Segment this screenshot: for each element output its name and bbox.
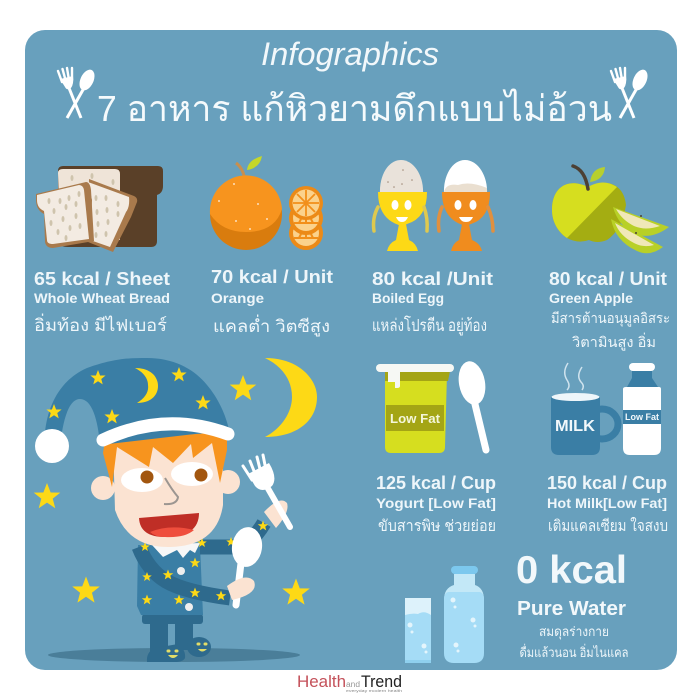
mouth: [139, 513, 199, 537]
label: orange: แคลต่ำ วิตซีสูง: [213, 314, 330, 337]
title: Thai headline: 7 อาหาร แก้หิวยามดึกแบบไม่อ้วน: [97, 88, 612, 129]
label: yogurt: ขับสารพิษ ช่วยย่อย: [378, 518, 496, 535]
label: boiled egg: Boiled Egg: [372, 291, 444, 306]
moon: [265, 358, 317, 437]
icon: right fork and spoon: [611, 67, 651, 118]
cap brim: [103, 424, 228, 440]
icon: green apple: [552, 166, 669, 253]
label: orange: Orange: [211, 291, 265, 306]
pajama body: [137, 545, 203, 615]
spoon: [229, 525, 265, 605]
label: pure water: สมดุลร่างกาย: [539, 624, 609, 640]
sleeve front: [139, 547, 230, 598]
label: pure water: [516, 549, 628, 660]
illustration: boy in nightcap: [34, 358, 317, 662]
body stars: [140, 520, 268, 604]
label: green apple: มีสารต้านอนุมูลอิสระ: [551, 310, 670, 327]
icon: orange: [210, 156, 323, 250]
logo: Health and Trend: Health: [297, 672, 346, 691]
nose: [164, 478, 178, 504]
icon: spoon: [455, 359, 489, 450]
label: pure water: ดื่มแล้วนอน อิ่มไนแคล: [520, 644, 628, 660]
title: [97, 36, 612, 129]
hair: [103, 432, 227, 487]
ears: [91, 476, 115, 500]
raised hand: [264, 500, 288, 528]
label: bread: [34, 269, 170, 335]
label: hot milk: Hot Milk[Low Fat]: [547, 496, 667, 511]
icon: low fat milk bottle: Low Fat: [625, 412, 660, 423]
logo: Health and Trend: [297, 672, 402, 693]
loose stars: [34, 375, 310, 605]
collar: [152, 543, 200, 558]
label: yogurt: Yogurt [Low Fat]: [376, 496, 496, 511]
label: yogurt: 125 kcal / Cup: [376, 473, 496, 493]
logo: Health and Trend: everyday modern health: [346, 688, 402, 693]
icon: hot milk mug: [551, 363, 618, 455]
sleeve raised: [200, 523, 264, 547]
icon: whole wheat bread: [36, 166, 163, 252]
cap moon: [135, 368, 158, 403]
label: pure water: 0 kcal: [516, 549, 627, 592]
label: green apple: [549, 269, 670, 351]
cap stars: [46, 367, 211, 423]
label: boiled egg: 80 kcal /Unit: [372, 269, 493, 289]
icon: boiled eggs: [374, 160, 493, 251]
icon: low fat milk bottle: [623, 363, 661, 455]
icon: left fork and spoon: [58, 67, 98, 118]
title: Infographics: Infographics: [261, 36, 439, 72]
face: [113, 440, 223, 547]
eyes: [121, 468, 163, 492]
label: hot milk: [547, 473, 668, 535]
label: yogurt: [376, 473, 496, 535]
label: green apple: 80 kcal / Unit: [549, 269, 667, 289]
label: green apple: วิตามินสูง อิ่ม: [572, 333, 656, 351]
icon: water bottle: [444, 566, 484, 663]
icon: water glass: [405, 598, 431, 663]
label: orange: 70 kcal / Unit: [211, 267, 333, 287]
shadow: [48, 648, 300, 662]
logo: Health and Trend: Trend: [361, 672, 402, 691]
label: orange: [211, 267, 333, 337]
label: bread: อิ่มท้อง มีไฟเบอร์: [34, 313, 167, 335]
pompom: [35, 429, 69, 463]
icon: low fat yogurt: Low Fat: [390, 412, 441, 426]
label: hot milk: 150 kcal / Cup: [547, 473, 667, 493]
label: hot milk: เติมแคลเซียม ใจสงบ: [548, 517, 668, 535]
nightcap: [45, 358, 229, 445]
hand: [227, 577, 255, 600]
fork: [243, 455, 290, 527]
label: bread: Whole Wheat Bread: [34, 291, 170, 306]
label: green apple: Green Apple: [549, 291, 634, 306]
label: boiled egg: แหล่งโปรตีน อยู่ท้อง: [372, 315, 487, 336]
legs and slippers: [142, 614, 211, 662]
label: bread: 65 kcal / Sheet: [34, 269, 170, 289]
label: pure water: Pure Water: [517, 598, 626, 620]
icon: low fat yogurt: [376, 364, 454, 453]
icon: hot milk mug: MILK: [555, 418, 595, 435]
label: boiled egg: [372, 269, 493, 336]
logo: Health and Trend: and: [346, 680, 360, 689]
